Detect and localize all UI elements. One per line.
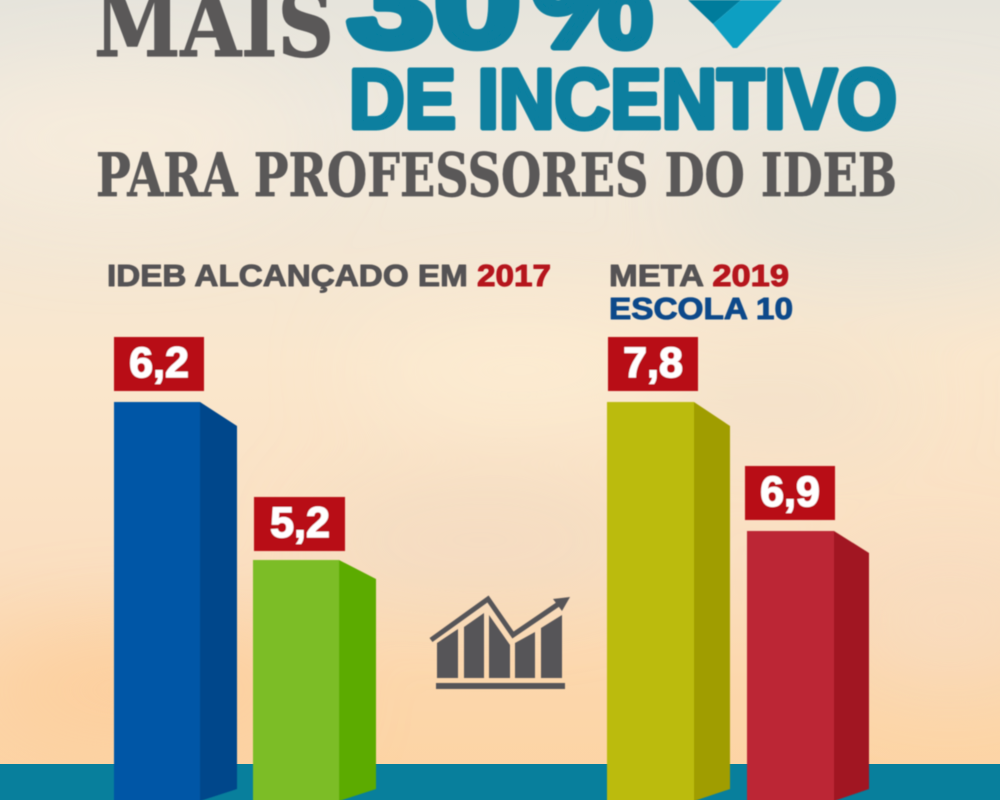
heading: IDEB 2017: IDEB ALCANÇADO EM 2017 — [107, 258, 551, 293]
title — [94, 0, 897, 211]
teal ground band — [0, 764, 1000, 800]
heading: Escola 10: ESCOLA 10 — [609, 291, 793, 326]
heading: meta 2019: META 2019 — [609, 258, 789, 293]
icon: rising chart — [431, 597, 570, 689]
bar: meta red 6,9 — [745, 466, 869, 800]
icon: teal check mark — [688, 0, 782, 48]
value label: 5,2: 5,2 — [270, 499, 330, 547]
title line: DE INCENTIVO: DE INCENTIVO — [349, 52, 897, 146]
value label: 7,8: 7,8 — [623, 339, 683, 387]
value label: 6,9: 6,9 — [760, 468, 820, 516]
value label: 7,8 — [608, 337, 698, 391]
title figure: 30% — [347, 0, 653, 75]
value label: 5,2 — [254, 497, 345, 551]
value label: 6,2: 6,2 — [129, 339, 189, 387]
value label: 6,9 — [745, 466, 835, 520]
bar: 2017 green 5,2 — [253, 497, 376, 800]
value label: 6,2 — [114, 337, 204, 391]
bar: meta yellow 7,8 — [607, 337, 730, 800]
bar: 2017 blue 6,2 — [114, 337, 237, 800]
